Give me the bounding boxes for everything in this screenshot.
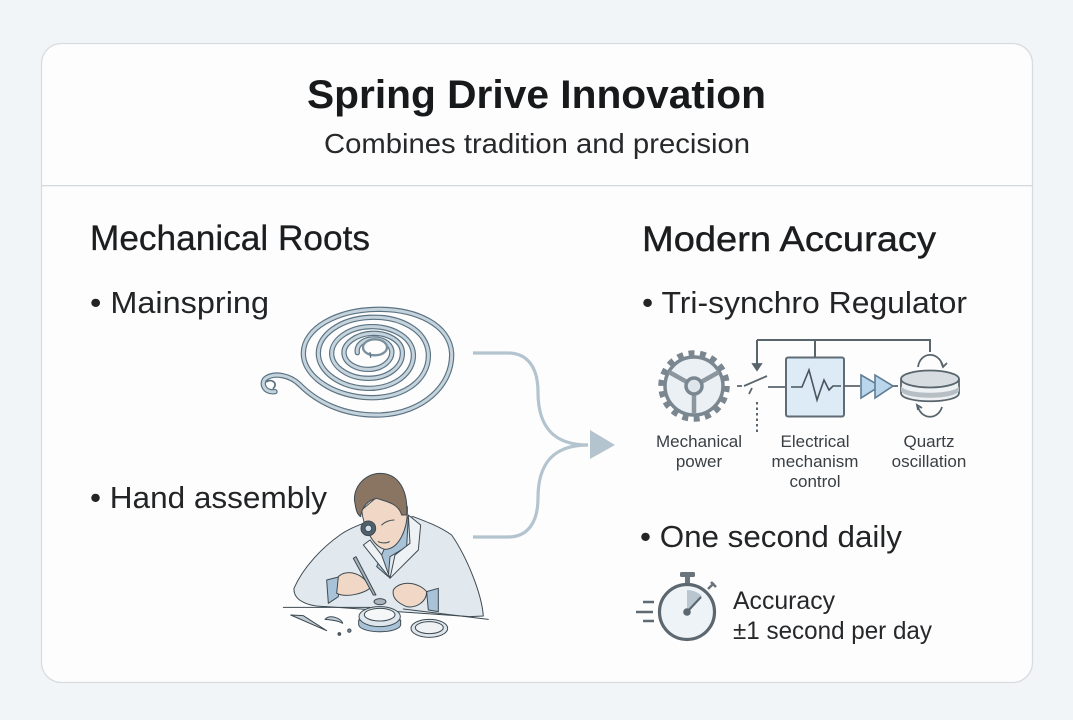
icon: gear	[661, 353, 727, 419]
text: accuracy: ±1 second per day	[733, 617, 932, 645]
icon: mainspring coil	[263, 309, 452, 415]
bullet: Hand assembly: • Hand assembly	[90, 480, 328, 515]
text: accuracy: Accuracy	[733, 587, 835, 615]
icon: switch	[737, 340, 786, 432]
icon: control box	[786, 358, 844, 416]
subtitle: Combines tradition and precision	[324, 128, 750, 159]
diagram: regulator	[656, 340, 966, 491]
labels: diagram captions: oscillation	[892, 452, 966, 471]
connector arrow	[473, 353, 615, 537]
bullet: Mainspring: • Mainspring	[90, 285, 269, 320]
labels: diagram captions: Quartz	[903, 432, 955, 451]
bullet: One second daily: • One second daily	[640, 519, 902, 554]
icon: stopwatch	[636, 572, 716, 640]
labels: diagram captions: control	[789, 472, 841, 491]
icon: amplifier triangles	[861, 375, 893, 398]
heading: Mechanical Roots: Mechanical Roots	[90, 219, 370, 258]
labels: diagram captions: Mechanical	[656, 432, 742, 451]
labels: diagram captions	[656, 432, 966, 491]
heading: Modern Accuracy: Modern Accuracy	[642, 220, 937, 259]
title: Spring Drive Innovation	[307, 73, 766, 117]
labels: diagram captions: power	[676, 452, 722, 471]
feedback line	[757, 340, 930, 357]
text: accuracy	[733, 587, 932, 645]
icon: quartz disc	[901, 355, 959, 417]
labels: diagram captions: Electrical	[781, 432, 849, 451]
bullet: Tri-synchro Regulator: • Tri-synchro Regulator	[642, 285, 967, 320]
labels: diagram captions: mechanism	[772, 452, 858, 471]
icon: watchmaker at bench	[283, 473, 488, 637]
